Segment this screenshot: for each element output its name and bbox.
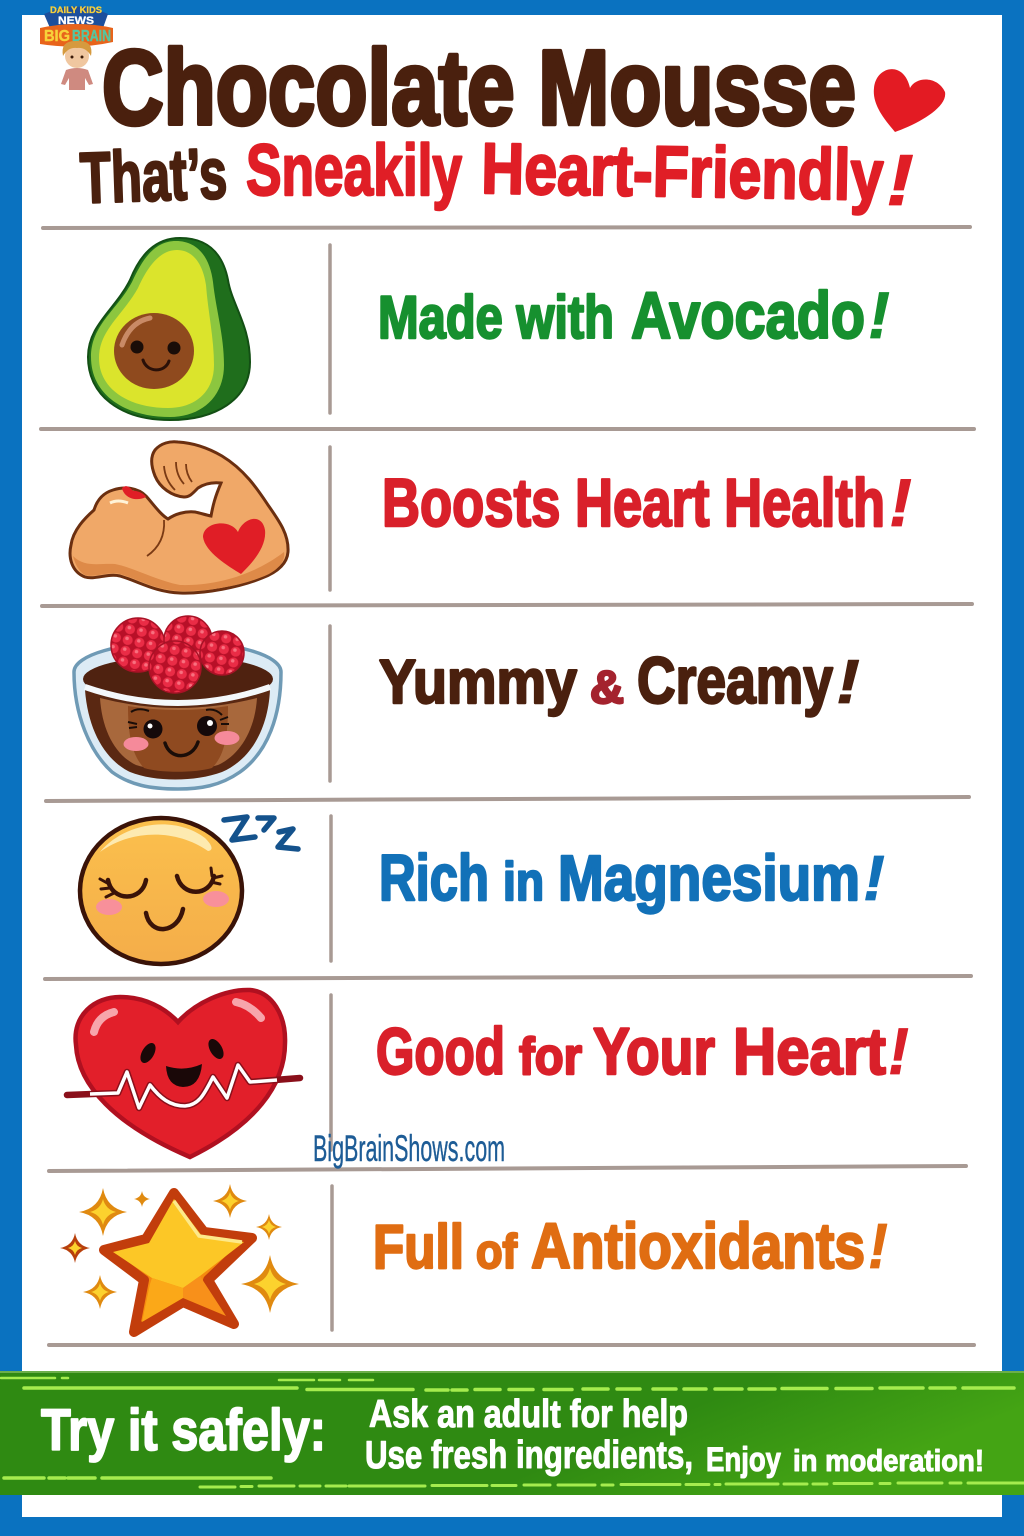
text: Boosts Heart Health: Boosts Heart Health (382, 465, 885, 541)
text: Yummy and Creamy: & (590, 661, 624, 713)
text: Rich in Magnesium: Rich (379, 841, 489, 914)
icon: sleeping face with zzz (80, 817, 298, 964)
title line 2: Heart-Friendly (481, 129, 884, 216)
icon: mousse bowl with raspberries (74, 616, 281, 789)
banner stitched dashes (1, 1378, 1024, 1487)
text: Full of Antioxidants: Full (373, 1213, 464, 1282)
row dividers (41, 227, 974, 1345)
text: Yummy and Creamy: ! (836, 648, 860, 717)
title line 2: Sneakily (246, 131, 462, 211)
icon: golden star with sparkles (60, 1184, 299, 1332)
panel: yummy and creamy row (74, 616, 860, 789)
text: Good for Your Heart: Heart (733, 1014, 886, 1088)
text: Made with Avocado: Made with (378, 284, 614, 351)
title line 2: ! (886, 141, 914, 221)
panel: good for your heart row (67, 990, 909, 1157)
watermark: BigBrainShows.com: BigBrainShows.com (313, 1128, 505, 1169)
text: Yummy and Creamy: Creamy (637, 643, 833, 717)
icon: avocado (88, 238, 250, 420)
panel: magnesium row (80, 817, 885, 964)
text: Rich in Magnesium: in (503, 852, 544, 912)
text: Yummy and Creamy (379, 643, 860, 717)
logo: Daily Kids News Big Brain (40, 5, 113, 90)
icon: smiling heart with pulse line (67, 990, 300, 1157)
text: Rich in Magnesium (379, 841, 885, 914)
panel: heart health row (70, 442, 912, 593)
banner tips: Use fresh ingredients, (365, 1434, 693, 1477)
title line 1: Chocolate Mousse (102, 29, 856, 147)
banner tips: in moderation! (793, 1443, 984, 1478)
text: Full of Antioxidants (373, 1210, 888, 1282)
banner tips (365, 1393, 984, 1479)
text: Good for Your Heart: Good (376, 1014, 505, 1088)
panel: antioxidants row (60, 1184, 888, 1332)
logo: Daily Kids News Big Brain: BRAIN (72, 28, 111, 45)
logo: Daily Kids News Big Brain: NEWS (58, 15, 94, 27)
panel: avocado row (88, 238, 890, 420)
text: Made with Avocado: Avocado (631, 278, 865, 352)
text: Good for Your Heart: for (519, 1028, 582, 1086)
icon: flexing arm with heart (70, 442, 288, 593)
title line 2 (79, 129, 914, 221)
panel: green safety banner (0, 1371, 1024, 1495)
banner heading: Try it safely: (41, 1398, 326, 1463)
text: Boosts Heart Health: ! (889, 465, 912, 541)
banner tips: Ask an adult for help (369, 1393, 688, 1436)
title line 2: That’s (79, 134, 228, 219)
text: Rich in Magnesium: ! (863, 842, 885, 914)
logo: Daily Kids News Big Brain: BIG (44, 28, 70, 45)
title (79, 29, 945, 221)
banner tips: Enjoy (706, 1441, 781, 1479)
text: Full of Antioxidants: Antioxidants (531, 1210, 865, 1282)
text: Full of Antioxidants: ! (868, 1210, 888, 1282)
icon: title heart (874, 69, 945, 132)
text: Good for Your Heart: Your (593, 1014, 715, 1088)
text: Full of Antioxidants: of (476, 1226, 518, 1279)
text: Made with Avocado (378, 278, 890, 352)
text: Made with Avocado: ! (868, 278, 890, 352)
text: Good for Your Heart (376, 1014, 909, 1088)
text: Rich in Magnesium: Magnesium (558, 842, 860, 914)
text: Good for Your Heart: ! (888, 1014, 909, 1088)
logo: Daily Kids News Big Brain: DAILY KIDS (50, 5, 102, 15)
text: Yummy and Creamy: Yummy (379, 648, 577, 717)
